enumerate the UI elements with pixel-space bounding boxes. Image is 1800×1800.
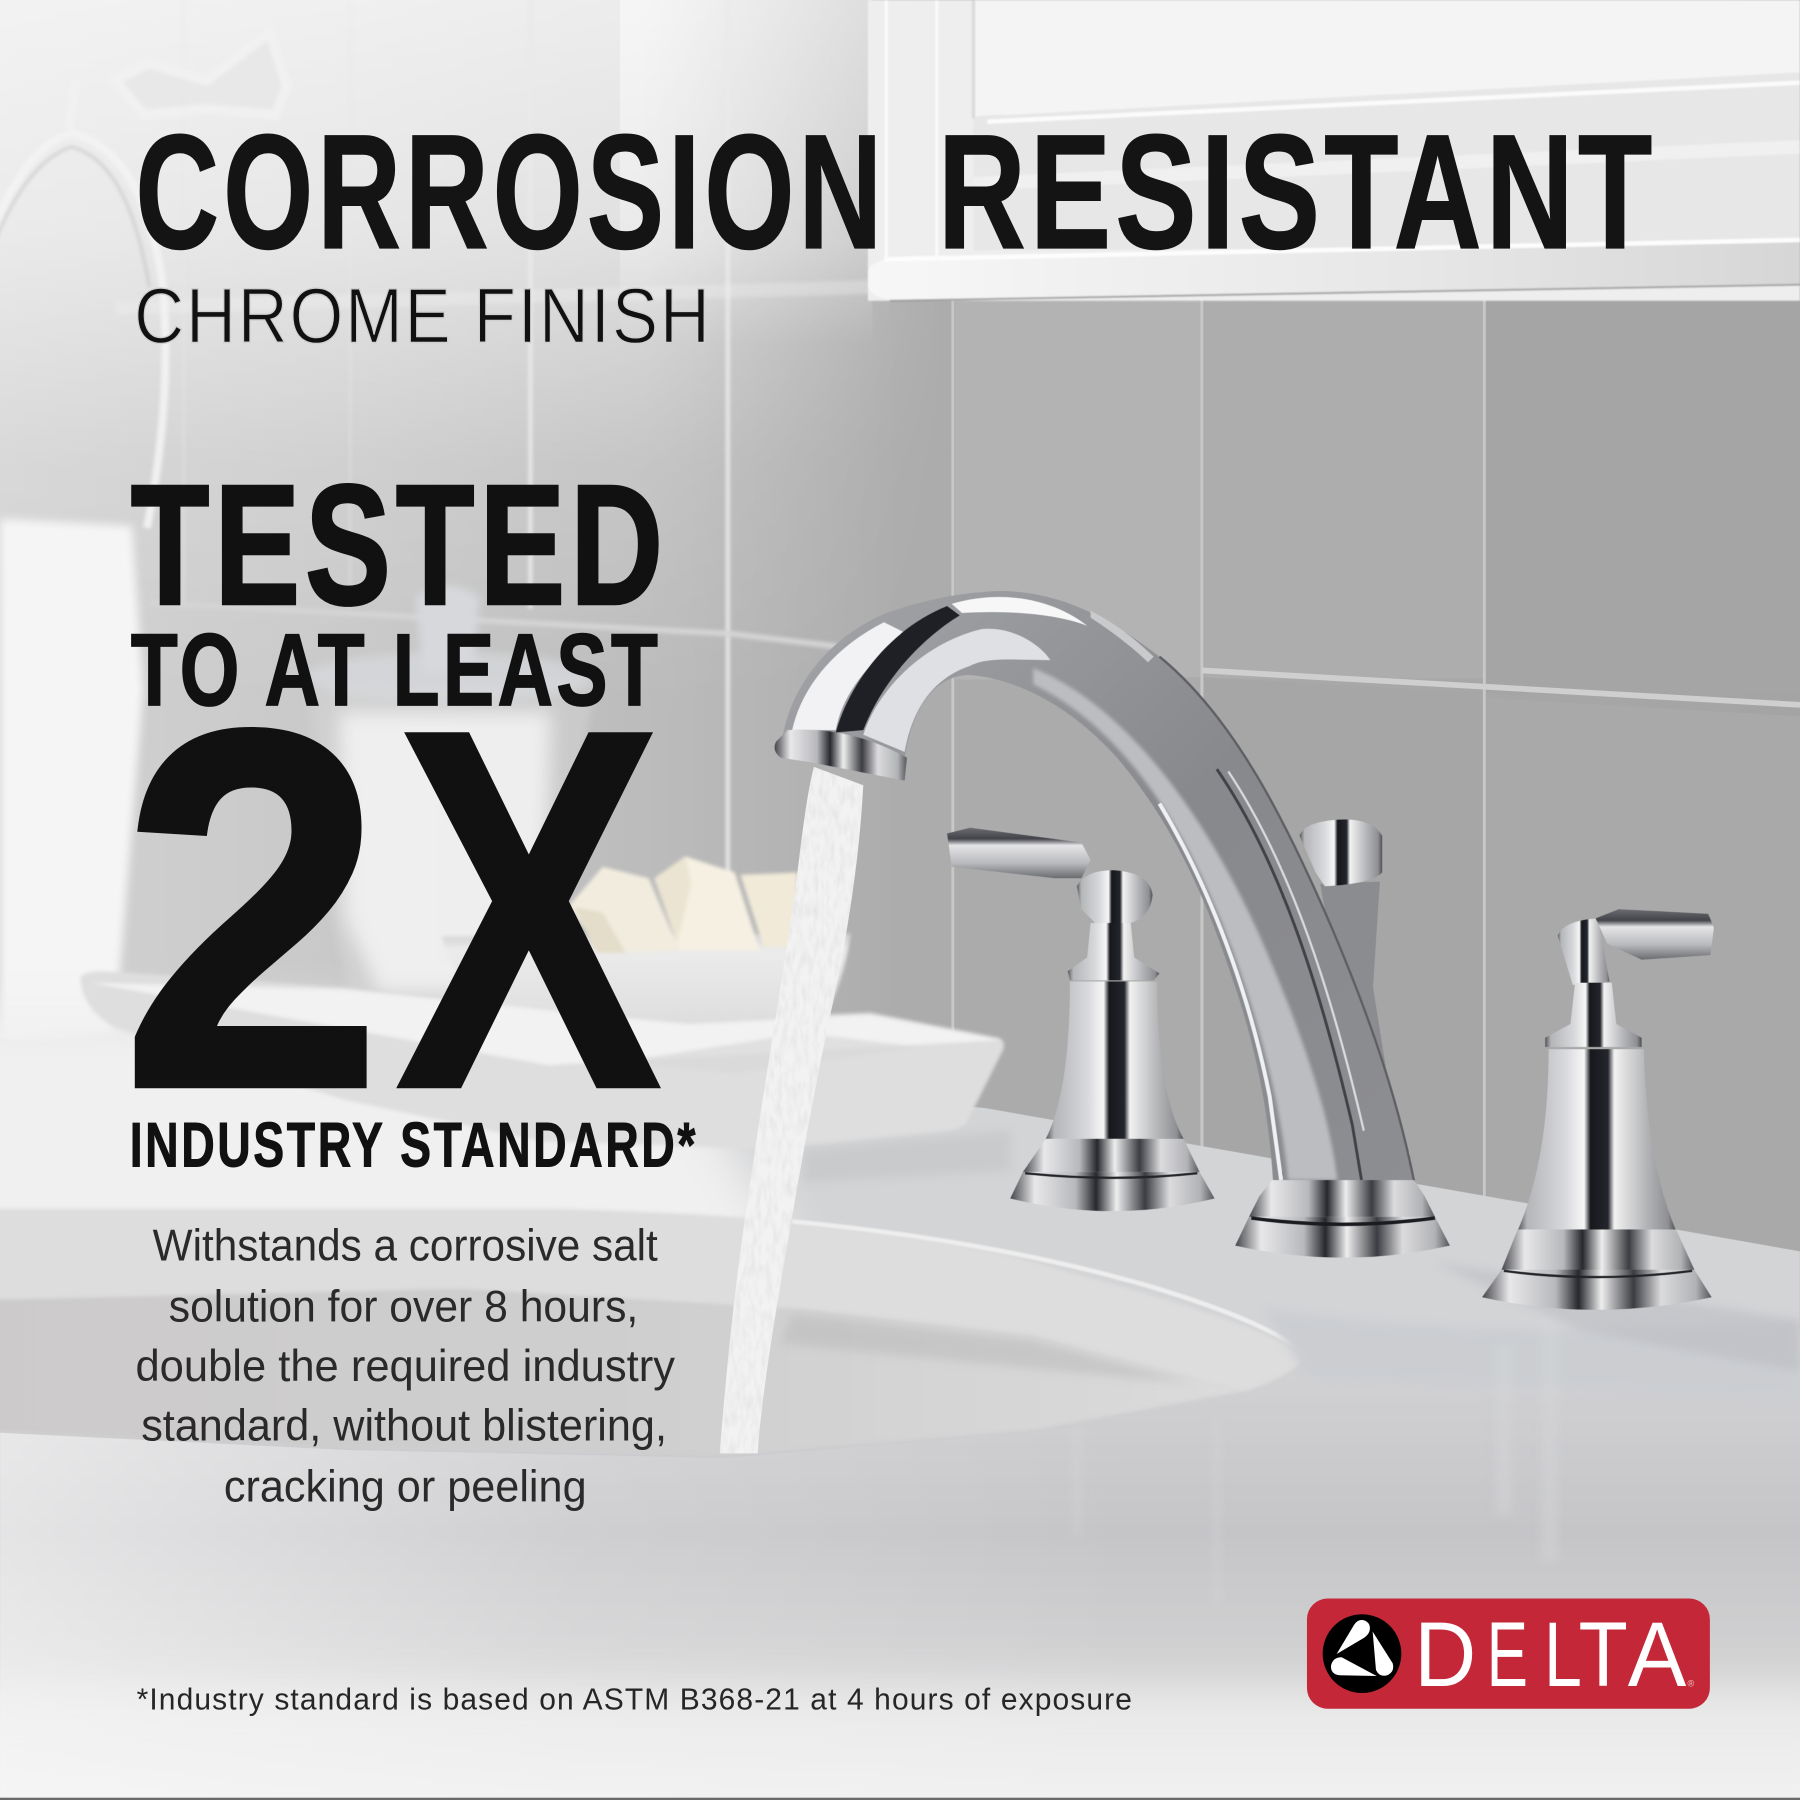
icon: Delta triangle mark bbox=[1323, 1614, 1401, 1693]
body text: solution for over 8 hours, bbox=[169, 1282, 638, 1331]
counter front left fade bbox=[0, 1418, 1148, 1800]
body text: Withstands a corrosive salt bbox=[153, 1221, 658, 1270]
claim: tested to at least 2X bbox=[121, 450, 698, 1195]
panel: counter front bbox=[0, 1332, 1800, 1800]
heading: industry standard: INDUSTRY STANDARD* bbox=[130, 1110, 698, 1180]
body text: standard, without blistering, bbox=[141, 1402, 667, 1451]
panel: counter back bbox=[0, 1039, 1800, 1515]
rim highlight bbox=[792, 1221, 1304, 1352]
sink bowl bbox=[0, 1289, 1246, 1456]
icon: spout aerator bbox=[774, 730, 907, 781]
spout inner bright bbox=[863, 629, 1050, 752]
water stream bbox=[720, 767, 863, 1453]
big letter X: X bbox=[396, 625, 663, 1195]
spout top highlight bbox=[952, 597, 1087, 626]
counter left glow bbox=[0, 1010, 804, 1263]
panel: sink rim bbox=[0, 1209, 1306, 1394]
logo: Delta bbox=[1307, 1599, 1710, 1709]
logo wordmark: T bbox=[1578, 1604, 1628, 1706]
registered mark: ® bbox=[1688, 1678, 1695, 1688]
icon: towel ring bbox=[0, 32, 287, 528]
bottom edge line bbox=[0, 1798, 1800, 1800]
panel: window frame bbox=[868, 0, 1800, 301]
panel: left wall tile grout bbox=[115, 0, 953, 1148]
logo wordmark: E bbox=[1487, 1604, 1528, 1706]
icon: right handle bbox=[1482, 909, 1714, 1310]
heading: to at least: TO AT LEAST bbox=[131, 613, 661, 727]
spout dark reflection bbox=[836, 606, 960, 732]
body text: double the required industry bbox=[135, 1342, 675, 1391]
icon: spout bbox=[783, 591, 1414, 1182]
icon: left handle bbox=[947, 828, 1215, 1211]
subtitle: CHROME FINISH bbox=[134, 272, 712, 360]
soap tray bbox=[80, 971, 1004, 1149]
title: CORROSION bbox=[135, 100, 886, 283]
bottom glow bbox=[0, 1688, 1800, 1800]
logo wordmark: L bbox=[1544, 1604, 1582, 1706]
soap dish bbox=[442, 933, 851, 1068]
footnote: *Industry standard is based on ASTM B368-21 at 4 hours of exposure bbox=[137, 1681, 1133, 1716]
icon: rear pop-up knob bbox=[1299, 819, 1391, 1102]
panel: faucet bbox=[774, 591, 1714, 1310]
big number 2: 2 bbox=[121, 625, 383, 1195]
spout inner white line bbox=[1159, 804, 1281, 1180]
counter reflections bbox=[804, 1131, 1800, 1607]
logo wordmark: A bbox=[1628, 1604, 1687, 1706]
icon: spout base bbox=[1235, 1180, 1450, 1258]
towel stack bbox=[0, 519, 143, 1045]
spout left highlight bbox=[792, 622, 907, 730]
logo wordmark bbox=[1414, 1604, 1687, 1706]
sink bowl shadow bbox=[781, 1314, 1194, 1383]
body text: cracking or peeling bbox=[224, 1463, 587, 1512]
body text bbox=[135, 1221, 675, 1512]
glass jar bbox=[304, 585, 597, 1016]
wall highlight fade bbox=[0, 0, 874, 494]
spout dark line bbox=[1217, 769, 1361, 1180]
spout broad sheen bbox=[1033, 668, 1337, 1180]
spout outer edge bbox=[1159, 657, 1414, 1182]
wall upper band highlight bbox=[620, 0, 872, 344]
heading: tested: TESTED bbox=[131, 450, 668, 641]
soap bars bbox=[568, 856, 798, 953]
logo wordmark: D bbox=[1414, 1604, 1476, 1706]
title bbox=[135, 100, 1657, 283]
panel: right wall tiles bbox=[953, 287, 1800, 1251]
